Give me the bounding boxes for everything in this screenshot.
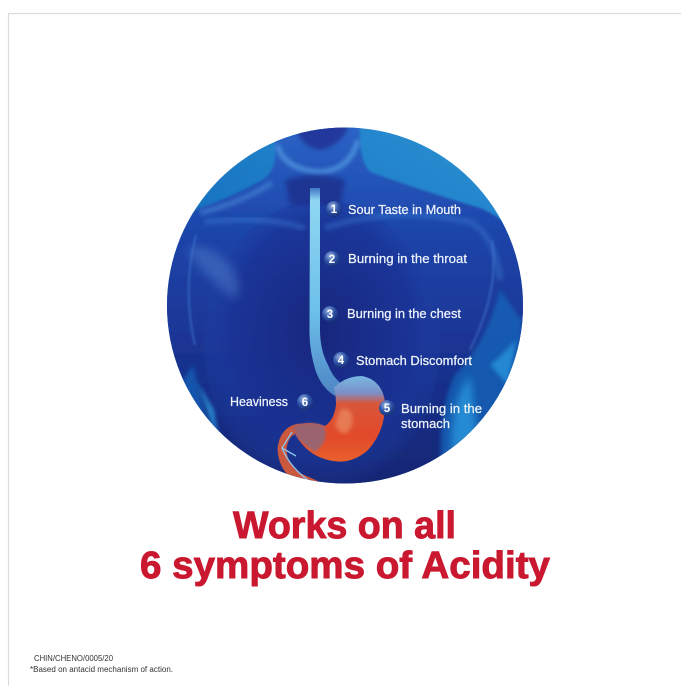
symptom 4 label: Stomach Discomfort xyxy=(356,353,472,368)
stomach xyxy=(293,376,385,462)
footnote: CHIN/CHENO/0005/20 xyxy=(34,654,114,663)
title: 6 symptoms of Acidity xyxy=(140,545,550,587)
symptom 5 label xyxy=(379,400,482,431)
symptom 5 label: Burning in the xyxy=(401,401,482,416)
symptom 2 label: 2 xyxy=(329,254,335,266)
esophagus xyxy=(309,188,342,396)
symptom 5 label: stomach xyxy=(401,416,450,431)
symptom 1 label: Sour Taste in Mouth xyxy=(348,202,461,217)
symptom 6 label xyxy=(230,394,313,410)
illustration: torso in circle xyxy=(160,120,530,490)
left side highlight xyxy=(183,366,208,419)
symptom 5 label: 5 xyxy=(384,403,391,415)
symptom 6 label: 6 xyxy=(302,397,308,409)
symptom 3 label: 3 xyxy=(327,309,333,321)
footnote xyxy=(30,654,173,674)
title: Works on all xyxy=(233,505,456,547)
symptom 2 label: Burning in the throat xyxy=(348,251,467,266)
symptom 1 label: 1 xyxy=(331,204,338,216)
right side highlight xyxy=(438,292,522,456)
symptom 3 label: Burning in the chest xyxy=(347,306,461,321)
title xyxy=(140,505,550,587)
duodenum xyxy=(282,428,316,485)
footnote: *Based on antacid mechanism of action. xyxy=(30,665,173,674)
symptom 4 label: 4 xyxy=(338,355,345,367)
symptom 6 label: Heaviness xyxy=(230,394,288,409)
